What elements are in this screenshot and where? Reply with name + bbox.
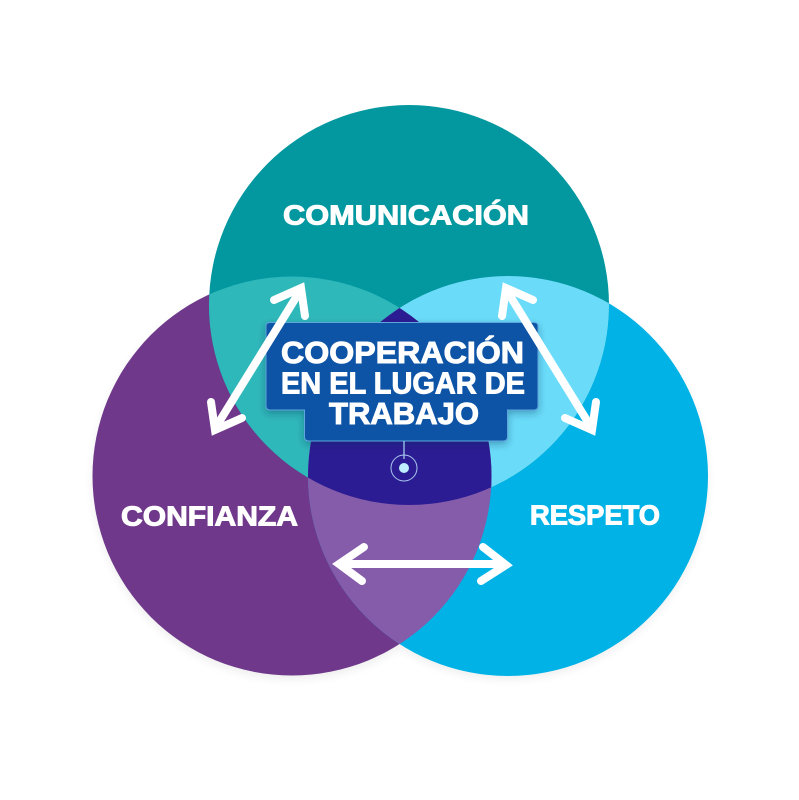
arrow: comunicación to respeto	[502, 288, 596, 430]
banner title: COOPERACIÓN	[281, 334, 524, 370]
circle: respeto	[308, 276, 708, 676]
overlap: center	[308, 308, 492, 505]
circle shadows	[93, 281, 707, 679]
circle: comunicación	[209, 105, 609, 505]
overlap: confianza and respeto	[308, 308, 492, 644]
overlap: comunicación and respeto	[308, 276, 609, 488]
label: confianza: CONFIANZA	[121, 500, 298, 532]
center banner	[266, 322, 538, 441]
banner title: TRABAJO	[329, 397, 479, 431]
overlap: comunicación and confianza	[209, 276, 400, 478]
venn diagram infographic	[92, 105, 708, 680]
center marker	[391, 441, 417, 481]
circle: confianza	[92, 276, 492, 676]
arrow: confianza to respeto	[339, 547, 506, 581]
arrow: comunicación to confianza	[211, 288, 305, 430]
banner title: EN EL LUGAR DE	[281, 366, 525, 400]
label: respeto: RESPETO	[530, 500, 660, 530]
banner title	[281, 334, 525, 431]
label: comunicación: COMUNICACIÓN	[283, 200, 529, 230]
